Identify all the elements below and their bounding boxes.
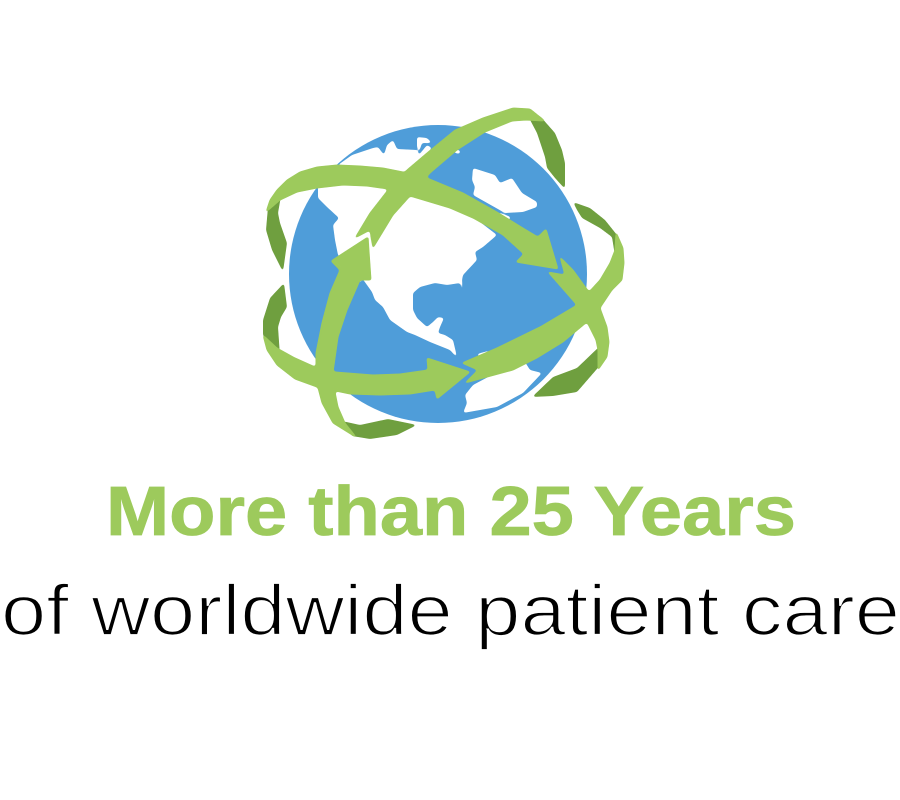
rear ring segments [263,116,621,439]
icon: globe with orbiting arrows [263,108,624,439]
arrow: right orbit tail [462,232,624,383]
arrow: lower left orbit [263,335,470,399]
arrow: top orbit tail [355,108,545,248]
northern Canada above the orbit [338,140,432,175]
eastern Canada sliver [497,212,511,225]
globe ocean [289,125,587,423]
arrow: upper orbit [266,165,558,269]
arrow: left orbit rising from the bottom [316,237,371,438]
subheading: of worldwide patient care: of worldwide patient care [1,572,900,651]
South America [463,362,542,413]
Greenland [472,168,537,213]
continents [318,137,542,413]
North America [318,178,497,368]
Arctic islands [417,137,432,152]
arrow: lower right orbit tail [548,257,609,370]
Baja California [358,278,372,304]
front arrows [263,108,624,438]
heading: More than 25 Years: More than 25 Years [106,472,796,550]
Caribbean island [477,351,492,358]
